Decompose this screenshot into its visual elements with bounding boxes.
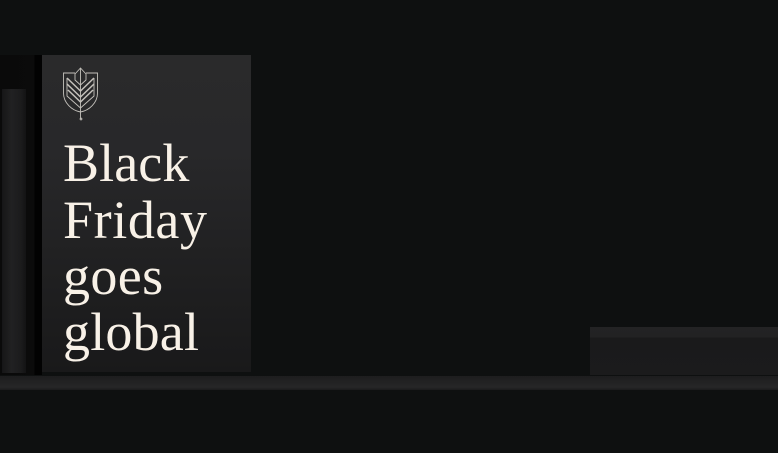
title: global [63, 302, 199, 362]
shelf [0, 376, 778, 390]
title [63, 133, 208, 362]
thin book spine [2, 89, 26, 373]
title: Black [63, 133, 189, 193]
back shadow behind books [0, 55, 42, 375]
lying book [590, 327, 778, 375]
panel: standing book cover [42, 55, 251, 372]
title: goes [63, 246, 164, 306]
icon: wheat shield logo [63, 68, 98, 120]
title: Friday [63, 190, 208, 250]
